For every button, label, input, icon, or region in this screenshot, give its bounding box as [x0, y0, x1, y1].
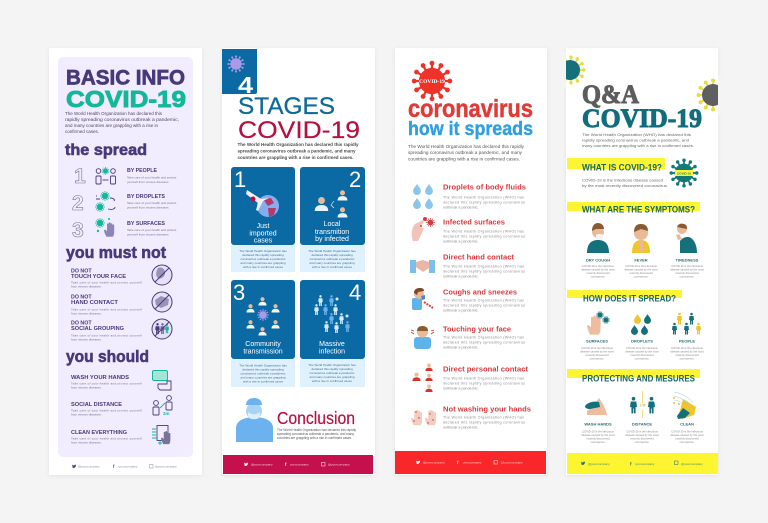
- stage 3 card: Community: [245, 341, 281, 348]
- action: social distance: 2m: [163, 411, 170, 416]
- rule: do not social grouping: SOCIAL GROUPING: [71, 326, 124, 332]
- symptom: dry cough: disease caused by the most: [581, 268, 615, 272]
- stage 4 card: declared this rapidly spreading: [311, 367, 353, 371]
- stage 3 card: 3: [233, 280, 245, 305]
- item: direct hand contact: The World Health Organization (WHO) has: [443, 264, 524, 268]
- step: by people: [74, 165, 176, 188]
- protection: wash hands: disease caused by the most: [581, 433, 615, 437]
- stage 2 card: [300, 167, 365, 272]
- title: coronavirus how it spreads: how it spreads: [408, 118, 533, 140]
- spread: people: [670, 313, 704, 360]
- symptom: dry cough: COVID-19 is the infectious: [582, 264, 614, 268]
- footer: social links: f: [285, 462, 287, 467]
- symptom: tiredness: COVID-19 is the infectious: [671, 264, 703, 268]
- stage 2 card: 2: [349, 167, 361, 192]
- stage 2 card: The World Health Organization has: [308, 249, 356, 253]
- symptom: dry cough: [581, 223, 615, 278]
- spread: surfaces: coronavirus.: [590, 356, 605, 360]
- symptom: fever: disease caused by the most: [624, 268, 658, 272]
- step: by surfaces: 3: [72, 219, 84, 242]
- step: by droplets: 2: [72, 192, 84, 215]
- item: direct personal contact: outbreak a pandemic.: [443, 386, 478, 390]
- heading: you must not: you must not: [66, 243, 166, 262]
- decoration: gray virus: [697, 76, 732, 114]
- step: by surfaces: BY SURFACES: [127, 221, 165, 227]
- stage 2 card: Local: [324, 221, 341, 228]
- step: by people: yourself from viruses diseases: [127, 180, 169, 184]
- stage 3 card: The World Health Organization has: [239, 364, 287, 368]
- conclusion text: [277, 408, 356, 440]
- title: q&a covid-19: COVID-19: [582, 104, 702, 133]
- heading: protecting and mesures: PROTECTING AND MESURES: [582, 374, 695, 384]
- step: by people: Take care of your health and protect: [127, 176, 176, 180]
- symptom: tiredness: TIREDNESS: [676, 258, 699, 262]
- panel: basic info: [49, 48, 202, 475]
- item: coughs and sneezes: Coughs and sneezes: [443, 288, 517, 296]
- symptom: fever: [624, 224, 658, 278]
- item: infected surfaces: The World Health Organization (WHO) has: [443, 230, 524, 234]
- stage 3 card: coronavirus outbreak a pandemic: [240, 372, 286, 376]
- item: direct personal contact: The World Health Organization (WHO) has: [443, 376, 524, 380]
- intro paragraph: countries are grappling with a rise in confirmed cases.: [238, 155, 354, 160]
- section: what is covid-19: [567, 158, 698, 188]
- intro paragraph: confirmed cases.: [65, 129, 99, 134]
- action: social distance: Take care of your health and protect yourself: [71, 408, 142, 412]
- stage 1 card: The World Health Organization has: [239, 249, 287, 253]
- number badge with virus: [222, 49, 257, 98]
- spread: people: COVID-19 is the infectious: [671, 346, 703, 350]
- protection: distance: disease caused by the most: [625, 433, 659, 437]
- panel: 4 stages: [222, 48, 375, 475]
- title: q&a covid-19: [582, 80, 702, 133]
- action: wash your hands: Take care of your health and protect yourself: [71, 382, 142, 386]
- spread: people: coronavirus.: [680, 356, 695, 360]
- protection: clean: COVID-19 is the infectious: [671, 430, 703, 434]
- conclusion text: Conclusion: [277, 408, 355, 428]
- panel: q&a covid-19: [553, 48, 732, 475]
- item: touching your face: declared this rapidly spreading coronavirus: [443, 340, 525, 344]
- rule: do not touch your face: Take care of your health and protect yourself: [71, 280, 142, 284]
- icon: red virus: COVID-19: [419, 79, 445, 85]
- stage 1 card: Just: [257, 223, 269, 230]
- intro paragraph: [65, 111, 179, 134]
- symptom: fever: coronavirus.: [634, 274, 649, 278]
- stage 2 card: declared this rapidly spreading: [311, 253, 353, 257]
- intro paragraph: [408, 144, 525, 162]
- conclusion text: countries are grappling with a rise in confirmed cases.: [277, 436, 352, 440]
- stage 3 card: with a rise in confirmed cases: [243, 380, 283, 384]
- spread: surfaces: COVID-19 is the infectious: [581, 346, 613, 350]
- item: droplets of body fluids: The World Health Organization (WHO) has: [443, 196, 524, 200]
- stage 3 card: and many countries are grappling: [240, 376, 286, 380]
- footer: social links: [72, 464, 177, 469]
- protection: clean: CLEAN: [680, 422, 694, 426]
- spread: droplets: disease caused by the most: [625, 350, 659, 354]
- heading: how does it spread: [567, 290, 682, 304]
- stage 1 card: with a rise in confirmed cases: [243, 265, 283, 269]
- protection: wash hands: COVID-19 is the infectious: [582, 430, 614, 434]
- protection: wash hands: WASH HANDS: [584, 422, 612, 426]
- rule: do not social grouping: Take care of your health and protect yourself: [71, 334, 142, 338]
- rule: do not social grouping: from viruses diseases.: [71, 338, 102, 342]
- item: coughs and sneezes: [412, 288, 525, 312]
- stage 2 card: with a rise in confirmed cases: [312, 265, 352, 269]
- heading: the spread: the spread: [65, 142, 147, 159]
- heading: what are the symptoms: [567, 202, 700, 214]
- section: what is covid-19: COVID-19: [677, 172, 691, 176]
- icon: doctor: [236, 398, 273, 442]
- rule: do not hand contact: [71, 292, 172, 316]
- spread: people: PEOPLE: [679, 338, 695, 344]
- conclusion text: spreading coronavirus outbreak a pandemic, and many: [277, 432, 354, 436]
- item: droplets of body fluids: Droplets of body fluids: [443, 182, 526, 192]
- action: clean everything: [71, 426, 170, 445]
- rule: do not hand contact: DO NOT: [71, 294, 92, 300]
- stage 2 card: by infected: [315, 236, 349, 243]
- footer: social links: @yourcompany: [588, 462, 610, 466]
- step: by droplets: BY DROPLETS: [127, 194, 165, 200]
- protection: distance: DISTANCE: [632, 422, 652, 426]
- symptom: fever: COVID-19 is the infectious: [625, 264, 657, 268]
- footer: social links: [567, 453, 718, 474]
- section: what is covid-19: COVID-19 is the infectious disease caused: [582, 178, 663, 182]
- number badge with virus: 4: [238, 72, 253, 98]
- title: coronavirus how it spreads: coronavirus: [408, 95, 533, 123]
- rule: do not touch your face: from viruses diseases.: [71, 284, 102, 288]
- stage 4 card: and many countries are grappling: [309, 375, 355, 379]
- item: coughs and sneezes: The World Health Organization (WHO) has: [443, 298, 524, 302]
- rule: do not social grouping: [71, 319, 172, 342]
- spread: droplets: recently discovered: [630, 353, 654, 357]
- item: direct hand contact: declared this rapidly spreading coronavirus: [443, 270, 525, 274]
- footer: social links: @yourcompany: [423, 460, 445, 464]
- action: wash your hands: [71, 370, 171, 390]
- item: touching your face: outbreak a pandemic.: [443, 346, 478, 350]
- item: droplets of body fluids: outbreak a pandemic.: [443, 206, 478, 210]
- intro paragraph: spreading coronavirus outbreak a pandemic, and many: [408, 150, 523, 155]
- heading: what are the symptoms: WHAT ARE THE SYMPTOMS?: [582, 204, 695, 214]
- stage 4 card: with a rise in confirmed cases: [312, 379, 352, 383]
- intro paragraph: many countries are grappling with a rise in confirmed cases.: [582, 143, 694, 148]
- step: by droplets: [72, 191, 176, 215]
- stage 4 card: infection: [319, 348, 345, 356]
- spread: droplets: [625, 314, 659, 360]
- stage 3 card: [231, 280, 295, 387]
- spread: surfaces: recently discovered: [585, 353, 609, 357]
- intro paragraph: [238, 142, 359, 160]
- footer: social links: @yourcompany: [681, 462, 703, 466]
- intro paragraph: The World Health Organization (WHO) has declared this: [582, 132, 691, 137]
- title: stages covid-19: [238, 93, 360, 144]
- title: basic info covid-19: COVID-19: [66, 86, 186, 112]
- stage 1 card: coronavirus outbreak a pandemic: [240, 257, 286, 261]
- stage 4 card: 4: [349, 280, 361, 305]
- protection: clean: [670, 392, 704, 444]
- stage 1 card: and many countries are grappling: [240, 261, 286, 265]
- item: coughs and sneezes: outbreak a pandemic.: [443, 308, 478, 312]
- footer: social links: @yourcompany: [155, 464, 177, 468]
- section: what is covid-19: by the most recently discovered coronavirus.: [582, 183, 668, 188]
- protection: clean: recently discovered: [675, 436, 699, 440]
- item: not washing your hands: [411, 404, 531, 430]
- section: what is covid-19: WHAT IS COVID-19?: [582, 162, 662, 172]
- footer: social links: f: [457, 460, 459, 465]
- rule: do not hand contact: Take care of your health and protect yourself: [71, 308, 142, 312]
- symptom: dry cough: coronavirus.: [591, 274, 606, 278]
- item: not washing your hands: Not washing your hands: [443, 404, 531, 414]
- intro paragraph: countries are grappling with a rise in confirmed cases.: [408, 156, 520, 162]
- symptom: tiredness: coronavirus.: [680, 274, 695, 278]
- icon: red virus: [412, 61, 452, 101]
- rule: do not hand contact: from viruses diseases.: [71, 312, 102, 316]
- step: by surfaces: yourself from viruses diseases: [127, 232, 169, 236]
- item: droplets of body fluids: declared this rapidly spreading coronavirus: [443, 200, 525, 204]
- item: direct personal contact: declared this rapidly spreading coronavirus: [443, 382, 525, 386]
- rule: do not hand contact: HAND CONTACT: [71, 300, 119, 306]
- stage 4 card: [300, 280, 365, 387]
- decoration: teal virus: [553, 52, 585, 88]
- protection: distance: coronavirus.: [635, 440, 650, 444]
- spread: surfaces: [580, 311, 614, 360]
- item: touching your face: [411, 324, 525, 350]
- intro paragraph: The World Health Organization has declared this rapidly: [408, 144, 525, 149]
- title: coronavirus how it spreads: [408, 95, 533, 140]
- stage 1 card: declared this rapidly spreading: [242, 253, 284, 257]
- footer: social links: yourcompany: [463, 460, 482, 464]
- footer: social links: [223, 455, 373, 474]
- item: not washing your hands: declared this rapidly spreading coronavirus: [443, 420, 525, 424]
- rule: do not social grouping: DO NOT: [71, 320, 92, 326]
- symptom: tiredness: recently discovered: [675, 271, 699, 275]
- symptom: fever: FEVER: [634, 258, 648, 262]
- intro paragraph: The World Health Organization has declared this: [65, 111, 163, 116]
- intro paragraph: rapidly spreading coronavirus outbreak a pandemic, and: [582, 138, 689, 142]
- action: wash your hands: from viruses diseases.: [71, 386, 102, 390]
- intro paragraph: rapidly spreading coronavirus outbreak a pandemic,: [65, 117, 179, 122]
- item: direct hand contact: outbreak a pandemic.: [443, 274, 478, 278]
- symptom: dry cough: DRY COUGH: [586, 258, 610, 262]
- item: infected surfaces: [412, 217, 525, 244]
- panel: coronavirus how it spreads: [395, 48, 547, 475]
- item: touching your face: Touching your face: [443, 324, 511, 334]
- spread: people: recently discovered: [675, 353, 699, 357]
- item: not washing your hands: The World Health Organization (WHO) has: [443, 416, 524, 420]
- heading: protecting and mesures: [567, 369, 700, 384]
- step: by droplets: yourself from viruses diseases: [127, 206, 169, 210]
- footer: social links: [395, 451, 546, 474]
- item: direct personal contact: Direct personal contact: [443, 364, 528, 374]
- title: basic info covid-19: [66, 66, 186, 112]
- item: infected surfaces: outbreak a pandemic.: [443, 240, 478, 244]
- protection: distance: COVID-19 is the infectious: [626, 430, 658, 434]
- step: by surfaces: [72, 218, 176, 242]
- action: clean everything: Take care of your health and protect yourself: [71, 436, 142, 440]
- item: infected surfaces: declared this rapidly spreading coronavirus: [443, 234, 525, 238]
- spread: surfaces: SURFACES: [586, 338, 608, 344]
- protection: distance: recently discovered: [630, 436, 654, 440]
- stage 2 card: coronavirus outbreak a pandemic: [309, 257, 355, 261]
- intro paragraph: The World Health Organization has declared this rapidly: [238, 142, 359, 147]
- item: droplets of body fluids: [413, 182, 526, 210]
- spread: droplets: COVID-19 is the infectious: [626, 346, 658, 350]
- action: social distance: from viruses diseases.: [71, 412, 102, 416]
- stage 2 card: transmition: [315, 229, 349, 236]
- stage 4 card: Massive: [319, 341, 345, 348]
- footer: social links: @yourcompany: [78, 464, 100, 468]
- action: clean everything: from viruses diseases.: [71, 440, 102, 444]
- stage 1 card: cases: [254, 238, 273, 244]
- title: basic info covid-19: BASIC INFO: [66, 66, 185, 90]
- item: not washing your hands: outbreak a pandemic.: [443, 426, 478, 430]
- stage 1 card: 1: [234, 167, 246, 192]
- symptom: tiredness: [670, 224, 704, 278]
- spread: surfaces: disease caused by the most: [580, 350, 614, 354]
- stage 4 card: The World Health Organization has: [308, 363, 356, 367]
- protection: wash hands: coronavirus.: [591, 440, 606, 444]
- footer: social links: f: [630, 462, 632, 466]
- protection: wash hands: recently discovered: [586, 436, 610, 440]
- conclusion text: The World Health Organization has declared this rapidly: [277, 428, 356, 432]
- protection: clean: disease caused by the most: [670, 433, 704, 437]
- stage 2 card: and many countries are grappling: [309, 261, 355, 265]
- action: social distance: SOCIAL DISTANCE: [71, 402, 122, 408]
- action: clean everything: CLEAN EVERYTHING: [71, 430, 127, 436]
- item: direct hand contact: [410, 252, 525, 278]
- action: wash your hands: WASH YOUR HANDS: [71, 375, 129, 381]
- symptom: dry cough: recently discovered: [586, 271, 610, 275]
- spread: people: disease caused by the most: [670, 350, 704, 354]
- title: stages covid-19: STAGES: [238, 93, 335, 120]
- stage 3 card: transmission: [243, 348, 283, 356]
- step: by surfaces: Take care of your health and protect: [127, 228, 176, 232]
- rule: do not touch your face: DO NOT: [71, 268, 92, 274]
- footer: social links: /yourcompany: [635, 462, 655, 466]
- heading: you should: you should: [66, 347, 149, 366]
- intro paragraph: and many countries are grappling with a rise in: [65, 123, 159, 128]
- stage 4 card: coronavirus outbreak a pandemic: [309, 371, 355, 375]
- action: social distance: [71, 396, 172, 416]
- footer: social links: f: [113, 464, 115, 469]
- symptom: fever: recently discovered: [629, 271, 653, 275]
- stage 3 card: declared this rapidly spreading: [242, 368, 284, 372]
- intro paragraph: [582, 132, 694, 148]
- symptom: tiredness: disease caused by the most: [670, 268, 704, 272]
- intro paragraph: spreading coronavirus outbreak a pandemic, and many: [238, 148, 356, 154]
- item: touching your face: The World Health Organization (WHO) has: [443, 336, 524, 340]
- title: stages covid-19: COVID-19: [238, 117, 360, 144]
- protection: distance: 2 M: [640, 404, 645, 408]
- spread: droplets: DROPLETS: [631, 338, 653, 344]
- item: coughs and sneezes: declared this rapidly spreading coronavirus: [443, 304, 525, 308]
- step: by droplets: Take care of your health and protect: [127, 201, 176, 205]
- spread: droplets: coronavirus.: [635, 356, 650, 360]
- item: infected surfaces: Infected surfaces: [443, 218, 505, 226]
- item: direct hand contact: Direct hand contact: [443, 252, 514, 262]
- protection: distance: [625, 391, 659, 444]
- title: q&a covid-19: Q&A: [582, 80, 639, 109]
- item: direct personal contact: [412, 364, 528, 392]
- footer: social links: @yourcompany: [328, 462, 350, 466]
- rule: do not touch your face: TOUCH YOUR FACE: [71, 274, 127, 280]
- heading: how does it spread: HOW DOES IT SPREAD?: [583, 294, 676, 304]
- step: by people: BY PEOPLE: [127, 168, 157, 174]
- step: by people: 1: [74, 165, 86, 188]
- stage 1 card: [231, 167, 295, 272]
- footer: social links: @yourcompany: [251, 462, 273, 466]
- footer: social links: @yourcompany: [501, 460, 523, 464]
- footer: social links: /yourcompany: [118, 464, 138, 468]
- protection: clean: coronavirus.: [680, 440, 695, 444]
- protection: wash hands: [581, 398, 615, 444]
- rule: do not touch your face: [71, 265, 172, 288]
- stage 1 card: imported: [249, 230, 277, 238]
- footer: social links: yourcompany: [290, 462, 309, 466]
